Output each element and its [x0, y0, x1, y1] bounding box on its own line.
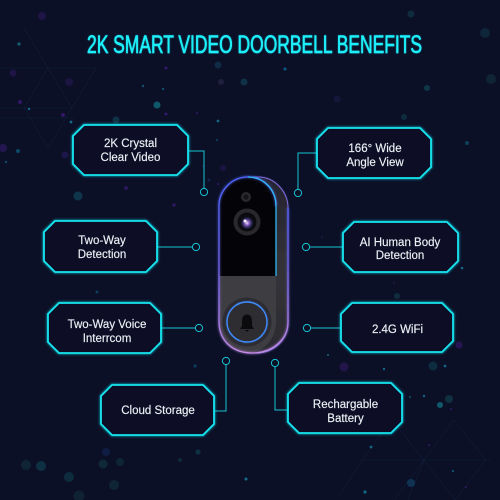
callout: Two-Way Detection: [44, 221, 200, 272]
callout: Two-Way Detection: Two-Way: [78, 235, 126, 247]
callout: AI Human Body Detection: AI Human Body: [360, 237, 441, 249]
callout: Two-Way Voice Interrcom: Interrcom: [83, 333, 131, 345]
callout: Cloud Storage: [101, 357, 230, 435]
callout: 2K Crystal Clear Video: Clear Video: [101, 152, 160, 164]
callout: Rechargable Battery: [271, 359, 402, 433]
device cyan edge: [248, 177, 276, 276]
doorbell device: [219, 177, 288, 353]
icon: doorbell button: [222, 298, 272, 346]
device glowing rim: [219, 177, 288, 353]
callout: AI Human Body Detection: Detection: [376, 250, 424, 262]
icon: bell: [240, 314, 254, 332]
callout: Two-Way Detection: Detection: [78, 249, 126, 261]
callout: 2K Crystal Clear Video: [73, 125, 208, 196]
callout: Rechargable Battery: Battery: [327, 413, 364, 425]
icon: light sensor: [241, 192, 251, 202]
callout: 2.4G WiFi: [303, 303, 453, 352]
callout: 2.4G WiFi: 2.4G WiFi: [372, 324, 423, 336]
device side body: [245, 177, 288, 353]
callout: 166 degree Wide Angle View: 166° Wide: [348, 143, 402, 155]
icon: camera lens: [234, 208, 260, 236]
callout: Two-Way Voice Interrcom: Two-Way Voice: [68, 319, 146, 331]
callout: 166 degree Wide Angle View: Angle View: [346, 157, 404, 169]
device grey lower front: [219, 276, 276, 353]
callout: 2K Crystal Clear Video: 2K Crystal: [104, 138, 157, 150]
callout: AI Human Body Detection: [302, 222, 458, 272]
callout: Two-Way Voice Interrcom: [48, 303, 203, 353]
callout: Cloud Storage: Cloud Storage: [121, 405, 195, 417]
device black upper front: [219, 177, 276, 276]
callout: Rechargable Battery: Rechargable: [313, 399, 378, 411]
callout: 166 degree Wide Angle View: [294, 128, 431, 197]
